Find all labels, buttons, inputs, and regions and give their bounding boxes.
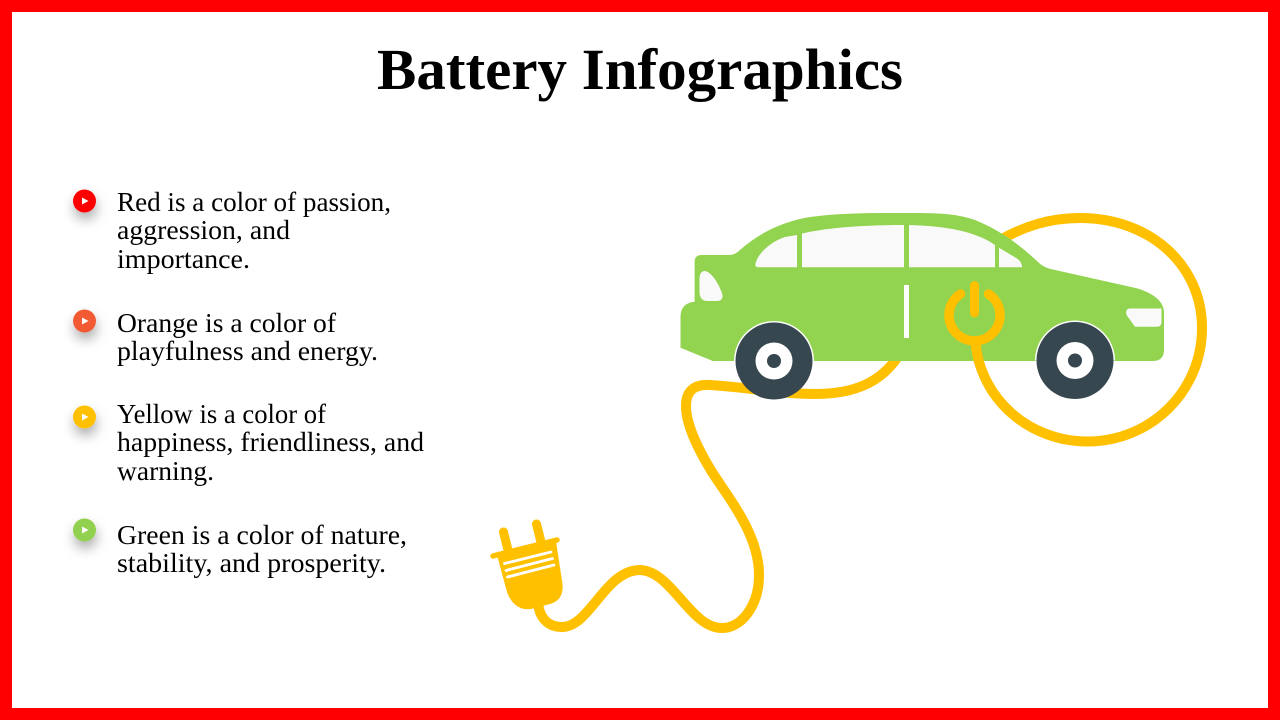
cable: loop behind the car bbox=[975, 218, 1202, 442]
list item: yellow bbox=[73, 399, 425, 486]
text: orange description bbox=[117, 308, 378, 366]
text: orange description: playfulness and energy. bbox=[117, 336, 378, 366]
front wheel bbox=[1035, 320, 1115, 399]
cable: stem from power symbol over the car bbox=[975, 340, 979, 362]
text: green description: Green is a color of nature, bbox=[117, 520, 407, 550]
text: red description: importance. bbox=[117, 244, 250, 274]
illustration: electric car with charging cable bbox=[493, 213, 1202, 628]
list item: green bbox=[73, 518, 407, 578]
car lights bbox=[700, 271, 1162, 327]
cable: lower cord to plug bbox=[538, 358, 897, 628]
car door line bbox=[904, 285, 909, 338]
text: yellow description: warning. bbox=[117, 456, 214, 486]
text: green description: stability, and prosperity. bbox=[117, 548, 386, 578]
icon: red bullet bbox=[73, 190, 96, 212]
text: red description: aggression, and bbox=[117, 215, 291, 245]
rear wheel bbox=[734, 321, 814, 400]
list item: red bbox=[73, 187, 391, 274]
text: orange description: Orange is a color of bbox=[117, 308, 336, 338]
icon: power symbol bbox=[949, 286, 1000, 341]
text: yellow description bbox=[117, 399, 425, 486]
text: green description bbox=[117, 520, 407, 578]
car windows bbox=[755, 225, 1022, 267]
text: red description: Red is a color of passion, bbox=[117, 187, 391, 217]
icon: plug bbox=[493, 524, 563, 609]
text: yellow description: Yellow is a color of bbox=[117, 399, 326, 429]
list item: orange bbox=[73, 308, 378, 366]
icon: yellow bullet bbox=[73, 406, 96, 428]
icon: green bullet bbox=[73, 518, 96, 542]
title: Battery Infographics bbox=[377, 37, 903, 102]
text: red description bbox=[117, 187, 391, 274]
car body bbox=[680, 213, 1164, 361]
text: yellow description: happiness, friendliness, and bbox=[117, 427, 425, 457]
icon: orange bullet bbox=[73, 310, 96, 332]
